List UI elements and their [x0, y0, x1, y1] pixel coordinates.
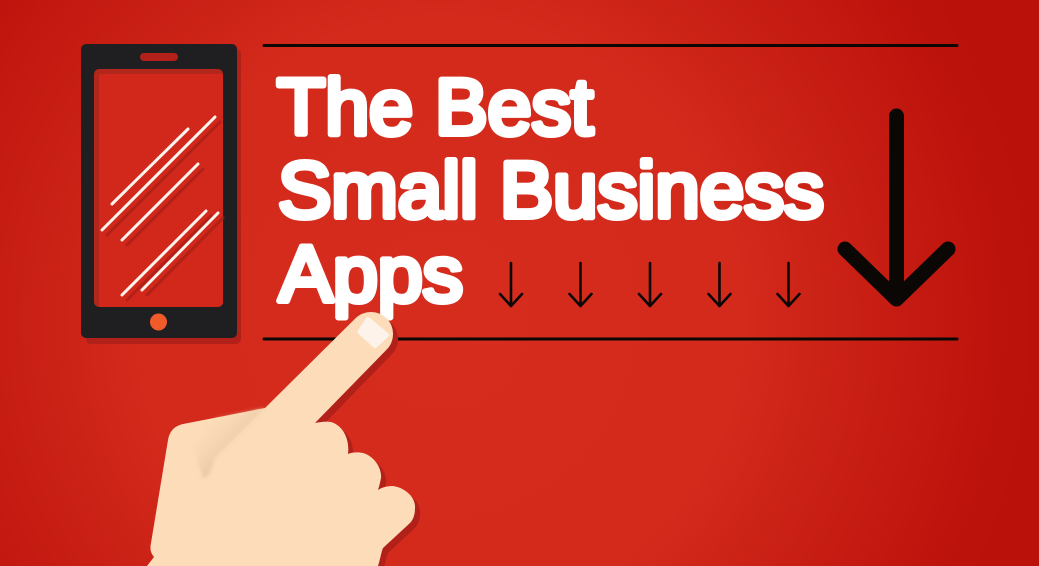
top rule [264, 44, 957, 47]
title: Small Business [278, 145, 824, 234]
title: Apps [279, 229, 463, 318]
large down arrow [845, 116, 948, 299]
icon: smartphone [81, 44, 241, 344]
bottom rule [264, 338, 957, 340]
title [277, 62, 824, 318]
small arrows row [500, 263, 800, 306]
title: The Best [277, 62, 593, 151]
icon: pointing hand [147, 312, 420, 566]
fingernail [360, 320, 386, 346]
thumb crease shading [192, 408, 265, 478]
